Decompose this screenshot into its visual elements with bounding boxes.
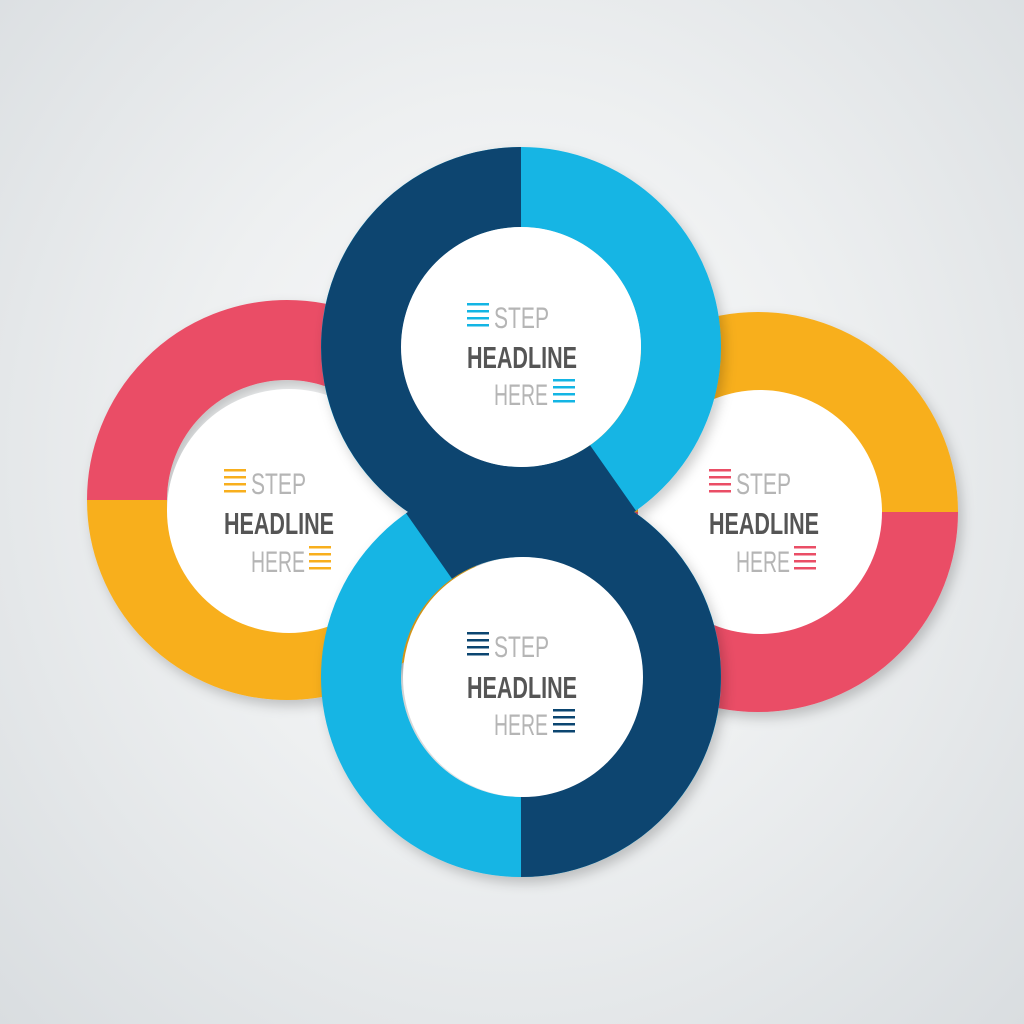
text: bottom step: STEP <box>494 631 549 664</box>
text: right step: HEADLINE <box>709 506 819 541</box>
ring: figure eight <box>361 187 681 837</box>
text: top step: STEP <box>494 302 549 335</box>
text: bottom step: HERE <box>494 709 548 742</box>
ring: right <box>598 352 918 672</box>
ring: left <box>127 340 447 660</box>
text: top step: HERE <box>494 379 548 412</box>
text: left step: STEP <box>251 468 306 501</box>
text: bottom step <box>467 631 577 742</box>
text: left step: HERE <box>251 546 305 579</box>
text: left step: HEADLINE <box>224 506 334 541</box>
text: right step: HERE <box>736 546 790 579</box>
text: left step <box>224 468 334 579</box>
text: right step: STEP <box>736 468 791 501</box>
text: right step <box>709 468 819 579</box>
text: bottom step: HEADLINE <box>467 670 577 705</box>
text: top step: HEADLINE <box>467 340 577 375</box>
text: top step <box>467 302 577 412</box>
